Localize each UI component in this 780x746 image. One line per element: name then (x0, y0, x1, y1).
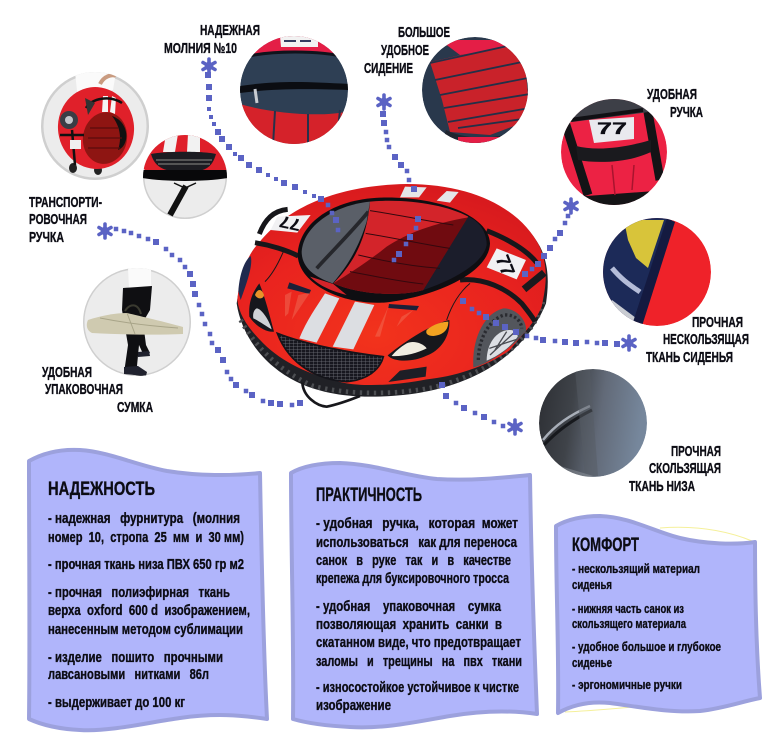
leader: big seat (378, 95, 419, 260)
list text: заломы и трещины на пвх ткани (316, 654, 522, 670)
panel: photo of seat (422, 37, 532, 150)
list text: сиденья (572, 577, 612, 592)
label: seat: СИДЕНИЕ (364, 61, 413, 77)
label: handle: РУЧКА (670, 105, 703, 121)
list text: - выдерживает до 100 кг (48, 695, 185, 711)
list text: - нижняя часть санок из (572, 601, 684, 616)
list text: скользящего материала (572, 616, 687, 631)
seat opening (298, 198, 490, 303)
number plate right: 77 (491, 252, 518, 279)
list text: - изделие пошито прочными (48, 650, 223, 666)
grille (277, 333, 383, 382)
list text: позволяющая хранить санки в (316, 617, 502, 633)
leader: handle (over tube) (525, 199, 577, 274)
list text: лавсановыми нитками 86л (48, 667, 209, 683)
handle right (524, 273, 544, 289)
label: zipper: НАДЕЖНАЯ (200, 23, 260, 39)
number plate left: 77 (278, 212, 302, 235)
list text: - износостойкое устойчивое к чистке (316, 680, 519, 696)
list text (48, 511, 250, 711)
panel: photo of transport handle (42, 72, 148, 179)
heading: НАДЕЖНОСТЬ (48, 479, 155, 500)
headlight left (249, 283, 274, 332)
list text: нанесенным методом сублимации (48, 622, 243, 638)
label: transport handle: РУЧКА (29, 230, 64, 246)
leader overlays on seat and strap (321, 189, 418, 260)
list text: использоваться как для переноса (316, 535, 518, 551)
label: storage bag (42, 365, 153, 416)
label: non-slip seat fabric: ТКАНЬ СИДЕНЬЯ (646, 350, 733, 366)
list text: сиденье (572, 655, 612, 670)
leader: reliable zipper (203, 59, 338, 230)
list text: номер 10, стропа 25 мм и 30 мм) (48, 530, 244, 546)
wheel (473, 308, 526, 367)
list text: - прочная полиэфирная ткань (48, 585, 230, 601)
leader: transport handle and bag (99, 224, 300, 405)
list text: - надежная фурнитура (молния (48, 511, 240, 527)
panel: practicality (291, 463, 537, 727)
label: handle (647, 87, 703, 121)
list text: - прочная ткань низа ПВХ 650 гр м2 (48, 557, 244, 573)
list text: изображение (316, 698, 391, 714)
label: seat: УДОБНОЕ (381, 43, 429, 59)
panel: photo of handle: 77 (597, 119, 627, 138)
hood stripes (299, 293, 374, 349)
panel: reliability (29, 450, 267, 730)
handle left (259, 209, 288, 234)
list text: - удобная упаковочная сумка (316, 599, 502, 615)
heading: ПРАКТИЧНОСТЬ (316, 485, 422, 506)
label: slippery bottom fabric (629, 444, 721, 495)
list text: - нескользящий материал (572, 561, 700, 576)
label: handle: УДОБНАЯ (647, 87, 697, 103)
skirt texture (241, 297, 544, 393)
label: transport handle (29, 195, 102, 246)
panel: photo of storage bag (83, 268, 191, 377)
label: transport handle: РОВОЧНАЯ (29, 212, 87, 228)
label: non-slip seat fabric: ПРОЧНАЯ (692, 315, 743, 331)
panel: photo of slippery bottom fabric (539, 369, 647, 478)
number plate right (487, 248, 526, 279)
list text: санок в руке так и в качестве (316, 553, 511, 569)
hood vents (287, 282, 419, 310)
label: zipper: МОЛНИЯ №10 (164, 41, 237, 57)
label: slippery bottom fabric: ПРОЧНАЯ (671, 444, 721, 460)
label: non-slip seat fabric (646, 315, 749, 366)
panel: photo of tow strap (143, 135, 227, 219)
panel: comfort (556, 516, 760, 713)
label: transport handle: ТРАНСПОРТИ- (29, 195, 102, 211)
label: zipper (164, 23, 260, 57)
label: slippery bottom fabric: СКОЛЬЗЯЩАЯ (649, 461, 721, 477)
leader: non-slip fabric (over tube) (463, 301, 635, 350)
side dark strip (525, 235, 546, 280)
number plate left (271, 212, 311, 235)
red upper body (237, 184, 546, 385)
panel: photo of zipper (240, 36, 350, 150)
list text: - удобная ручка, которая может (316, 516, 518, 532)
label: storage bag: УПАКОВОЧНАЯ (45, 382, 123, 398)
label: slippery bottom fabric: ТКАНЬ НИЗА (629, 479, 695, 495)
list text (572, 561, 721, 692)
panel: photo of handle (560, 95, 668, 210)
panel: photo of non-slip seat fabric (603, 218, 711, 330)
heading: КОМФОРТ (572, 535, 639, 556)
lower skirt (237, 185, 548, 397)
list text: верха oxford 600 d изображением, (48, 603, 250, 619)
label: seat (364, 25, 450, 77)
illustration: inflatable snow tube with car print (237, 184, 548, 407)
list text (316, 516, 522, 714)
leader: slippery fabric (over tube) (442, 385, 521, 434)
list text: - эргономичные ручки (572, 677, 682, 692)
list text: скатанном виде, что предотвращает (316, 635, 521, 651)
list text: - удобное большое и глубокое (572, 639, 721, 654)
label: storage bag: СУМКА (117, 400, 153, 416)
list text: крепежа для буксировочного тросса (316, 571, 510, 587)
lower vent (388, 367, 427, 382)
headlight right (388, 320, 449, 361)
black straps (255, 231, 537, 322)
side panel left (238, 256, 251, 300)
label: seat: БОЛЬШОЕ (398, 25, 450, 41)
tow strap (302, 383, 360, 407)
label: storage bag: УДОБНАЯ (42, 365, 92, 381)
